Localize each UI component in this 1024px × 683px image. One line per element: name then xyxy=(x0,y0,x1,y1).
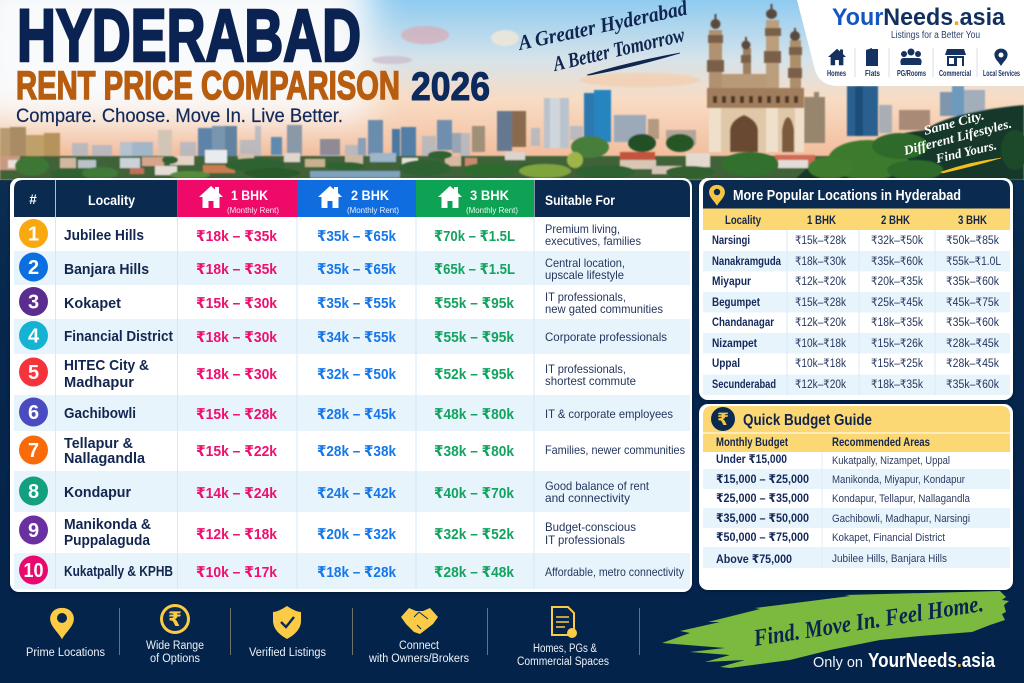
row 7: Tellapur and Nallagandla: ₹15k – ₹22k xyxy=(196,443,278,460)
location: Chandanagar: Chandanagar xyxy=(712,317,774,329)
row 9: Manikonda and Puppalaguda: ₹20k – ₹32k xyxy=(317,526,397,543)
icon: PG rooms: PG/Rooms xyxy=(897,69,926,78)
row 5: HITEC City and Madhapur: 5 xyxy=(28,362,39,384)
row 2: Banjara Hills: upscale lifestyle xyxy=(545,268,624,282)
feature strip xyxy=(26,604,640,668)
script callout: same city different lifestyles: Different Lifestyles. xyxy=(901,116,1013,158)
brush slogan: Find. Move In. Feel Home. xyxy=(751,591,985,652)
row 9: Manikonda and Puppalaguda: Puppalaguda xyxy=(64,532,151,549)
row 9: Manikonda and Puppalaguda: ₹12k – ₹18k xyxy=(196,526,278,543)
location: Uppal: Uppal xyxy=(712,358,740,370)
row 7: Tellapur and Nallagandla: Nallagandla xyxy=(64,450,146,467)
row 9: Manikonda and Puppalaguda: IT professionals xyxy=(545,533,625,547)
2 BHK header xyxy=(318,186,399,215)
row 9: Manikonda and Puppalaguda: ₹32k – ₹52k xyxy=(434,526,515,543)
icon: homes xyxy=(827,49,846,78)
row 3: Kokapet: ₹15k – ₹30k xyxy=(196,295,278,312)
row 4: Financial District: ₹18k – ₹30k xyxy=(196,329,278,346)
panel: quick budget guide xyxy=(699,404,1013,590)
feature: wide range of options: ₹ xyxy=(168,609,182,631)
icon: commercial xyxy=(939,49,971,78)
row 5: HITEC City and Madhapur: ₹18k – ₹30k xyxy=(196,366,278,383)
script callout: same city different lifestyles: Same City. xyxy=(922,107,986,138)
row 10: Kukatpally and KPHB: ₹28k – ₹48k xyxy=(434,564,515,581)
locations panel heading: More Popular Locations in Hyderabad xyxy=(733,188,961,204)
panel: more popular locations xyxy=(699,178,1013,400)
budget: under 15000: Kukatpally, Nizampet, Uppal xyxy=(832,455,950,467)
low-rise houses xyxy=(0,156,1024,180)
row 6: Gachibowli: ₹15k – ₹28k xyxy=(196,406,278,423)
icon: flats: Flats xyxy=(865,69,880,78)
location: Nizampet: Nizampet xyxy=(712,338,757,350)
row 7: Tellapur and Nallagandla: Tellapur & xyxy=(64,435,133,452)
row 9: Manikonda and Puppalaguda: Budget-conscious xyxy=(545,520,636,534)
row 2: Banjara Hills: Banjara Hills xyxy=(64,261,149,278)
script callout: same city different lifestyles xyxy=(901,107,1013,173)
location: Nanakramguda: ₹55k–₹1.0L xyxy=(946,256,1002,268)
budget: 25000 to 35000 xyxy=(716,491,971,505)
feature: connect with owners and brokers: Connect xyxy=(399,640,440,652)
row 4: Financial District: 4 xyxy=(28,326,40,348)
budget: 50000 to 75000 xyxy=(716,530,945,544)
budget panel heading: Quick Budget Guide xyxy=(743,412,872,429)
budget: 35000 to 50000 xyxy=(716,511,970,525)
icon: local services xyxy=(983,49,1020,78)
location: Secunderabad: ₹12k–₹20k xyxy=(795,379,846,391)
budget: 15000 to 25000: ₹15,000 – ₹25,000 xyxy=(716,472,809,486)
row 10: Kukatpally and KPHB: ₹10k – ₹17k xyxy=(196,564,278,581)
row 2: Banjara Hills: ₹65k – ₹1.5L xyxy=(434,261,515,278)
row 5: HITEC City and Madhapur: Madhapur xyxy=(64,374,134,391)
row 7: Tellapur and Nallagandla: ₹28k – ₹38k xyxy=(317,443,397,460)
location: Begumpet: ₹15k–₹28k xyxy=(795,297,846,309)
row 9: Manikonda and Puppalaguda: 9 xyxy=(28,520,39,542)
location: Narsingi xyxy=(712,235,999,247)
row 3: Kokapet: Kokapet xyxy=(64,295,121,312)
budget: 25000 to 35000: Kondapur, Tellapur, Nallagandla xyxy=(832,493,971,505)
feature: homes PGs and commercial spaces xyxy=(517,607,609,668)
icon: homes: Homes xyxy=(827,69,846,78)
location: Chandanagar xyxy=(712,317,999,329)
row 1: Jubilee Hills xyxy=(19,219,641,248)
panel: quick budget guide: Recommended Areas xyxy=(832,437,930,449)
budget: 15000 to 25000: Manikonda, Miyapur, Kondapur xyxy=(832,474,965,486)
location: Nizampet: ₹15k–₹26k xyxy=(871,338,923,350)
budget panel heading xyxy=(703,406,1010,432)
row 5: HITEC City and Madhapur: HITEC City & xyxy=(64,357,149,374)
row 3: Kokapet: IT professionals, xyxy=(545,290,626,304)
script slogan: A Greater Hyderabad xyxy=(514,0,690,76)
location: Nanakramguda: ₹35k–₹60k xyxy=(871,256,923,268)
2 BHK header: 2 BHK xyxy=(351,188,389,203)
location: Begumpet: ₹25k–₹45k xyxy=(871,297,923,309)
location: Chandanagar: ₹35k–₹60k xyxy=(946,317,999,329)
subtitle: rent price comparison 2026: RENT PRICE COMPARISON xyxy=(16,64,400,108)
table header row xyxy=(14,180,690,217)
row 6: Gachibowli: 6 xyxy=(28,402,39,424)
subtitle: rent price comparison 2026: 2026 xyxy=(411,65,490,109)
feature: wide range of options: of Options xyxy=(150,653,200,665)
location: Nanakramguda xyxy=(712,256,1002,268)
budget: under 15000 xyxy=(716,452,950,467)
row 8: Kondapur: ₹40k – ₹70k xyxy=(434,485,515,502)
location: Uppal: ₹15k–₹25k xyxy=(871,358,923,370)
row 1: Jubilee Hills: 1 xyxy=(28,224,39,246)
logo wordmark: YourNeeds.asia xyxy=(832,4,1006,31)
location: Narsingi: ₹50k–₹85k xyxy=(946,235,999,247)
location: Secunderabad xyxy=(712,379,999,391)
location: Uppal: ₹28k–₹45k xyxy=(946,358,999,370)
row 9: Manikonda and Puppalaguda: Manikonda & xyxy=(64,516,151,533)
budget panel heading: ₹ xyxy=(717,410,729,429)
location: Miyapur xyxy=(712,276,999,288)
row 7: Tellapur and Nallagandla: ₹38k – ₹80k xyxy=(434,443,515,460)
location: Uppal xyxy=(712,358,999,370)
row 5: HITEC City and Madhapur: shortest commute xyxy=(545,374,636,388)
location: Nizampet: ₹28k–₹45k xyxy=(946,338,999,350)
row 6: Gachibowli: IT & corporate employees xyxy=(545,407,673,421)
row 1: Jubilee Hills: executives, families xyxy=(545,234,641,248)
feature: homes PGs and commercial spaces: Homes, PGs & xyxy=(533,643,597,655)
budget: above 75000: Jubilee Hills, Banjara Hills xyxy=(832,553,947,565)
row 6: Gachibowli: ₹48k – ₹80k xyxy=(434,406,515,423)
location: Miyapur: ₹20k–₹35k xyxy=(871,276,923,288)
row 4: Financial District: ₹55k – ₹95k xyxy=(434,329,515,346)
script slogan: A Greater Hyderabad: A Better Tomorrow xyxy=(549,22,687,76)
location: Begumpet: ₹45k–₹75k xyxy=(946,297,999,309)
location: Chandanagar: ₹12k–₹20k xyxy=(795,317,846,329)
location: Chandanagar: ₹18k–₹35k xyxy=(871,317,923,329)
row 3: Kokapet: 3 xyxy=(28,292,39,314)
tagline: Compare. Choose. Move In. Live Better. xyxy=(16,106,343,127)
footer brand: Only on xyxy=(813,654,863,671)
1 BHK header: (Monthly Rent) xyxy=(227,205,279,215)
location: Uppal: ₹10k–₹18k xyxy=(795,358,846,370)
location: Miyapur: ₹35k–₹60k xyxy=(946,276,999,288)
feature: homes PGs and commercial spaces: Commercial Spaces xyxy=(517,656,609,668)
row 2: Banjara Hills xyxy=(19,252,625,282)
location: Narsingi: ₹15k–₹28k xyxy=(795,235,846,247)
row 1: Jubilee Hills: ₹35k – ₹65k xyxy=(317,228,397,245)
location: Nizampet: ₹10k–₹18k xyxy=(795,338,846,350)
row 2: Banjara Hills: ₹18k – ₹35k xyxy=(196,261,278,278)
footer brand: YourNeeds.asia xyxy=(868,650,996,672)
1 BHK header: 1 BHK xyxy=(231,188,268,203)
green brush banner xyxy=(662,591,1009,668)
table header row: # xyxy=(29,192,37,207)
row 8: Kondapur: 8 xyxy=(28,481,39,503)
panel: main rent table xyxy=(10,178,692,592)
budget: above 75000: Above ₹75,000 xyxy=(716,552,792,566)
row 5: HITEC City and Madhapur: IT professionals, xyxy=(545,362,626,376)
row 2: Banjara Hills: ₹35k – ₹65k xyxy=(317,261,397,278)
logo tagline: Listings for a Better You xyxy=(891,30,980,41)
row 9: Manikonda and Puppalaguda xyxy=(19,516,636,549)
row 5: HITEC City and Madhapur xyxy=(19,357,636,391)
panel: quick budget guide: Monthly Budget xyxy=(716,437,788,449)
icon: flats xyxy=(865,48,880,78)
icon: PG rooms xyxy=(897,48,926,78)
budget: 35000 to 50000: ₹35,000 – ₹50,000 xyxy=(716,511,809,525)
location: Narsingi: ₹32k–₹50k xyxy=(871,235,923,247)
row 4: Financial District xyxy=(19,321,667,350)
location: Nanakramguda: Nanakramguda xyxy=(712,256,781,268)
row 1: Jubilee Hills: ₹18k – ₹35k xyxy=(196,228,278,245)
3 BHK header xyxy=(438,186,518,215)
feature: prime locations: Prime Locations xyxy=(26,647,105,659)
row 3: Kokapet xyxy=(19,287,663,316)
row 8: Kondapur: and connectivity xyxy=(545,491,630,505)
location: Nizampet xyxy=(712,338,999,350)
location: Secunderabad: Secunderabad xyxy=(712,379,776,391)
row 3: Kokapet: new gated communities xyxy=(545,302,663,316)
row 5: HITEC City and Madhapur: ₹52k – ₹95k xyxy=(434,366,515,383)
row 8: Kondapur: Good balance of rent xyxy=(545,479,650,493)
row 10: Kukatpally and KPHB: Affordable, metro connectivity xyxy=(545,565,684,579)
budget: above 75000 xyxy=(716,552,947,566)
row 7: Tellapur and Nallagandla: 7 xyxy=(28,440,39,462)
row 8: Kondapur xyxy=(19,476,650,506)
row 6: Gachibowli: ₹28k – ₹45k xyxy=(317,406,397,423)
icon: commercial: Commercial xyxy=(939,69,971,78)
budget: 35000 to 50000: Gachibowli, Madhapur, Narsingi xyxy=(832,513,970,525)
row 4: Financial District: Corporate professionals xyxy=(545,330,667,344)
location: Begumpet xyxy=(712,297,999,309)
distant buildings xyxy=(72,126,583,165)
script callout: same city different lifestyles: Find Yours. xyxy=(933,137,998,166)
locations panel heading xyxy=(703,180,1010,208)
table header row: Locality xyxy=(88,193,135,208)
panel: more popular locations: 3 BHK xyxy=(958,215,988,227)
2 BHK header: (Monthly Rent) xyxy=(347,205,399,215)
location: Narsingi: Narsingi xyxy=(712,235,750,247)
feature: wide range of options xyxy=(146,604,204,665)
footer brand xyxy=(813,650,996,672)
table header row: Suitable For xyxy=(545,193,616,208)
panel: more popular locations: Locality xyxy=(725,215,761,227)
row 8: Kondapur: ₹24k – ₹42k xyxy=(317,485,397,502)
location: Secunderabad: ₹35k–₹60k xyxy=(946,379,999,391)
row 10: Kukatpally and KPHB: 10 xyxy=(24,560,44,582)
row 10: Kukatpally and KPHB: Kukatpally & KPHB xyxy=(64,563,173,580)
1 BHK header xyxy=(199,186,279,215)
row 7: Tellapur and Nallagandla xyxy=(19,435,685,467)
feature: verified listings xyxy=(249,606,326,659)
location: Miyapur: ₹12k–₹20k xyxy=(795,276,846,288)
row 5: HITEC City and Madhapur: ₹32k – ₹50k xyxy=(317,366,397,383)
location: Begumpet: Begumpet xyxy=(712,297,760,309)
row 10: Kukatpally and KPHB: ₹18k – ₹28k xyxy=(317,564,397,581)
row 4: Financial District: Financial District xyxy=(64,328,173,345)
row 2: Banjara Hills: Central location, xyxy=(545,256,625,270)
panel: more popular locations: 1 BHK xyxy=(807,215,837,227)
3 BHK header: 3 BHK xyxy=(470,188,509,203)
row 3: Kokapet: ₹35k – ₹55k xyxy=(317,295,397,312)
budget: 50000 to 75000: ₹50,000 – ₹75,000 xyxy=(716,530,809,544)
location: Nanakramguda: ₹18k–₹30k xyxy=(795,256,846,268)
row 8: Kondapur: ₹14k – ₹24k xyxy=(196,485,278,502)
feature: prime locations xyxy=(26,608,105,659)
location: Secunderabad: ₹18k–₹35k xyxy=(871,379,923,391)
3 BHK header: (Monthly Rent) xyxy=(466,205,518,215)
row 10: Kukatpally and KPHB xyxy=(19,556,684,584)
feature: verified listings: Verified Listings xyxy=(249,647,326,659)
row 1: Jubilee Hills: Jubilee Hills xyxy=(64,227,144,244)
row 2: Banjara Hills: 2 xyxy=(28,257,39,279)
budget: 25000 to 35000: ₹25,000 – ₹35,000 xyxy=(716,491,809,505)
row 4: Financial District: ₹34k – ₹55k xyxy=(317,329,397,346)
illustration: Charminar monument xyxy=(707,4,804,176)
row 7: Tellapur and Nallagandla: Families, newer communities xyxy=(545,443,685,457)
feature: connect with owners and brokers xyxy=(368,608,469,665)
header cityscape background xyxy=(0,0,1024,180)
feature: connect with owners and brokers: with Owners/Brokers xyxy=(368,653,469,665)
row 1: Jubilee Hills: ₹70k – ₹1.5L xyxy=(434,228,515,245)
row 6: Gachibowli: Gachibowli xyxy=(64,405,136,422)
row 6: Gachibowli xyxy=(19,398,673,426)
location: Miyapur: Miyapur xyxy=(712,276,751,288)
budget: under 15000: Under ₹15,000 xyxy=(716,452,787,466)
row 1: Jubilee Hills: Premium living, xyxy=(545,222,620,236)
row 8: Kondapur: Kondapur xyxy=(64,484,131,501)
budget: 15000 to 25000 xyxy=(716,472,965,486)
row 3: Kokapet: ₹55k – ₹95k xyxy=(434,295,515,312)
panel: more popular locations: 2 BHK xyxy=(881,215,911,227)
feature: wide range of options: Wide Range xyxy=(146,640,204,652)
budget: 50000 to 75000: Kokapet, Financial District xyxy=(832,532,945,544)
panel: YourNeeds.asia logo xyxy=(797,0,1024,86)
